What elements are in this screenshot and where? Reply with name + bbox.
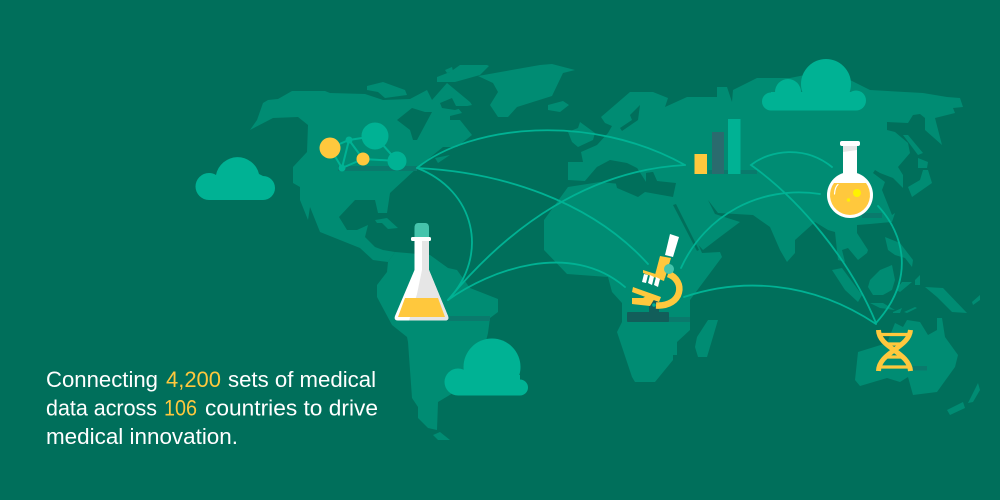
Japan (903, 135, 932, 197)
caption line 1: 4,200 (166, 367, 221, 392)
icon: microscope (627, 234, 679, 322)
Arctic islands (367, 65, 489, 98)
Caribbean (375, 218, 398, 229)
cloud: top right (762, 59, 866, 110)
icon: round flask (827, 141, 873, 218)
caption text (46, 367, 378, 449)
cloud: left (196, 157, 275, 200)
caption line 1: sets of medical (228, 367, 376, 392)
icon: DNA helix (878, 330, 910, 371)
Africa (544, 182, 722, 382)
North America (250, 83, 472, 262)
caption line 2: countries to drive (205, 396, 378, 420)
caption line 1: Connecting (46, 367, 158, 392)
icon: molecule network (320, 122, 406, 172)
caption line 2: 106 (164, 396, 197, 420)
seas cut into the map (397, 98, 699, 251)
caption line 2: data across (46, 396, 157, 420)
icon: bar chart (694, 119, 740, 174)
South America (377, 252, 498, 430)
cloud: South America (444, 338, 528, 396)
Eurasia (568, 70, 963, 262)
Newfoundland (435, 155, 450, 163)
Southeast Asian islands (832, 237, 920, 313)
British Isles (568, 122, 595, 147)
world map (250, 64, 980, 440)
icon: conical flask (395, 223, 448, 320)
connection lines (417, 130, 902, 324)
icon ground shadows (338, 166, 927, 370)
New Zealand (947, 383, 980, 415)
Greenland (478, 64, 575, 117)
Australia (855, 318, 958, 395)
Madagascar (695, 320, 718, 357)
New Guinea (925, 287, 980, 313)
Iceland (548, 101, 569, 112)
caption line 3: medical innovation. (46, 424, 238, 449)
Tierra del Fuego (433, 432, 450, 440)
